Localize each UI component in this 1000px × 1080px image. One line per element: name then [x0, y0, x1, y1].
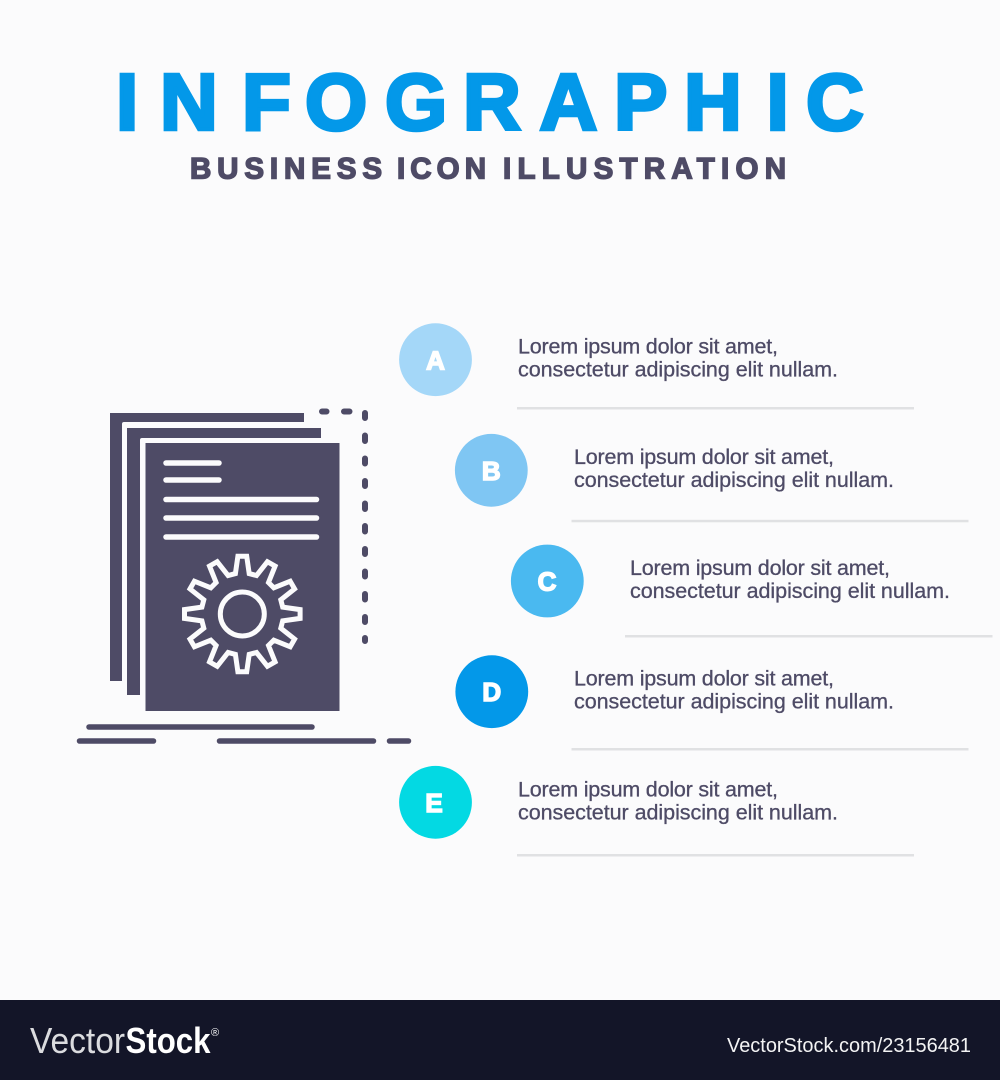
- dashed outline: [322, 412, 365, 641]
- item C: [511, 545, 992, 638]
- text lines on page: [166, 463, 316, 537]
- divider D: [572, 748, 968, 750]
- footer logo: [30, 1020, 219, 1061]
- subtitle: ILLUSTRATION: [503, 152, 786, 186]
- text E: Lorem ipsum dolor sit amet,: [518, 777, 778, 801]
- item D: [455, 655, 968, 750]
- icon: document pages with gear: [80, 412, 408, 741]
- footer id: VectorStock.com/23156481: [727, 1034, 971, 1057]
- text A: [518, 334, 838, 381]
- ground lines: [80, 727, 408, 741]
- subtitle: BUSINESS: [190, 152, 382, 186]
- divider E: [517, 854, 914, 856]
- text D: Lorem ipsum dolor sit amet,: [574, 666, 834, 690]
- item B: [455, 434, 968, 522]
- footer bar: [0, 1000, 1000, 1080]
- circle C: [511, 545, 584, 617]
- text B: consectetur adipiscing elit nullam.: [574, 468, 894, 492]
- text E: consectetur adipiscing elit nullam.: [518, 800, 838, 824]
- circle B: [455, 434, 528, 507]
- back page: [110, 413, 304, 681]
- text B: Lorem ipsum dolor sit amet,: [574, 445, 834, 469]
- divider B: [572, 520, 968, 522]
- text C: [630, 556, 950, 603]
- letter A: A: [426, 345, 445, 375]
- middle page: [127, 428, 321, 695]
- text D: consectetur adipiscing elit nullam.: [574, 689, 894, 713]
- gear: [184, 556, 300, 672]
- letter C: C: [538, 566, 557, 596]
- front page: [146, 443, 340, 711]
- text A: consectetur adipiscing elit nullam.: [518, 357, 838, 381]
- text A: Lorem ipsum dolor sit amet,: [518, 334, 778, 358]
- text E: [518, 777, 838, 824]
- text B: [574, 445, 894, 492]
- circle A: [399, 323, 472, 396]
- text C: consectetur adipiscing elit nullam.: [630, 579, 950, 603]
- divider C: [625, 635, 992, 638]
- subtitle: [190, 152, 786, 186]
- subtitle: ICON: [397, 152, 486, 186]
- text C: Lorem ipsum dolor sit amet,: [630, 556, 890, 580]
- item A: [399, 323, 914, 410]
- footer logo: Vector: [30, 1020, 125, 1061]
- title: INFOGRAPHIC: [116, 57, 864, 146]
- text D: [574, 666, 894, 713]
- footer logo: Stock: [126, 1020, 211, 1061]
- item E: [399, 766, 914, 856]
- letter D: D: [482, 677, 501, 707]
- letter E: E: [425, 788, 443, 818]
- divider A: [517, 407, 914, 410]
- circle E: [399, 766, 472, 839]
- letter B: B: [482, 456, 501, 486]
- footer logo: ®: [211, 1027, 219, 1039]
- circle D: [455, 655, 528, 728]
